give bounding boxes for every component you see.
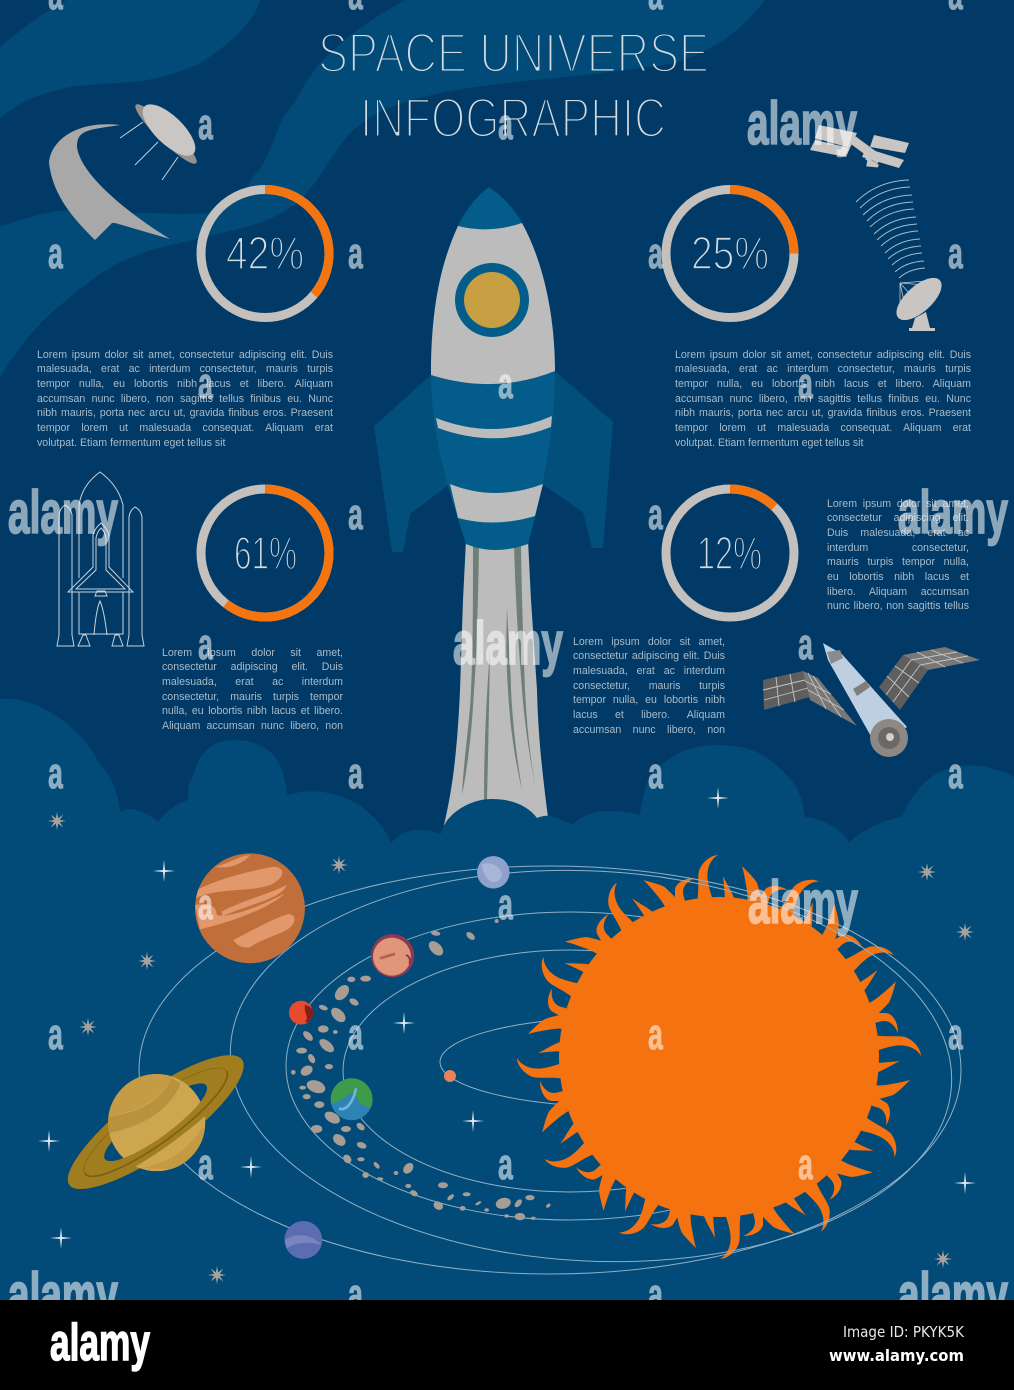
text block: top left: malesuada, erat ac interdum consectetur, mauris turpis — [37, 363, 333, 375]
text block: lower left: Lorem ipsum dolor sit amet, — [162, 647, 343, 659]
text block: lower right: Duis malesuada, erat ac — [827, 527, 969, 539]
watermark pattern: a — [498, 879, 513, 929]
icon: satellite station — [810, 125, 909, 168]
watermark pattern: a — [198, 1139, 213, 1189]
watermark pattern: alamy — [8, 479, 118, 546]
text block: lower centre: consectetur, mauris turpis — [573, 680, 725, 692]
rocket fins — [374, 371, 613, 552]
watermark pattern: a — [198, 358, 213, 408]
footer bar — [0, 1300, 1014, 1390]
donut: 42% — [201, 190, 329, 318]
text block: lower right: interdum consectetur, — [827, 542, 969, 554]
text block: lower right: consectetur adipiscing elit. — [827, 512, 969, 524]
lower cloud background — [0, 698, 1014, 1300]
planet: earth — [330, 1078, 373, 1120]
rocket exhaust — [444, 540, 549, 825]
rocket window — [455, 263, 529, 337]
watermark pattern: a — [198, 99, 213, 149]
watermark pattern: a — [348, 228, 363, 278]
text block: lower left: Aliquam accumsan nunc libero, non — [162, 720, 343, 732]
text block: top left — [37, 349, 333, 449]
text block: top left: volutpat. Etiam fermentum eget tellus sit — [37, 437, 225, 449]
text block: lower centre: Lorem ipsum dolor sit amet, — [573, 636, 725, 648]
donut: 25%: 25% — [691, 227, 769, 279]
watermark pattern: a — [648, 489, 663, 539]
text block: top right: accumsan nunc libero, non sagittis tellus finibus eu. Nunc — [675, 393, 971, 405]
outer orbits — [139, 852, 962, 1280]
icon: signal waves — [856, 180, 925, 278]
footer bar: www.alamy.com — [829, 1346, 964, 1365]
planet: mars — [289, 1001, 314, 1025]
text block: lower right: mauris turpis tempor nulla, — [827, 556, 969, 568]
watermark pattern: a — [198, 619, 213, 669]
text block: lower right: nunc libero, non sagittis tellus — [827, 600, 969, 612]
planet: saturn — [68, 1055, 244, 1189]
text block: top right — [675, 349, 971, 449]
watermark pattern: a — [498, 1139, 513, 1189]
icon: telescope satellite — [763, 643, 980, 757]
footer bar: Image ID: PKYK5K — [843, 1323, 965, 1341]
text block: lower left: consectetur adipiscing elit. Duis — [162, 661, 343, 673]
rocket — [374, 187, 613, 825]
text block: lower left — [162, 647, 343, 732]
watermark pattern: alamy — [453, 610, 563, 677]
watermark pattern: a — [498, 99, 513, 149]
donut: 42%: 42% — [226, 227, 304, 279]
text block: lower left: consectetur, mauris turpis tempor — [162, 691, 343, 703]
donut: 61%: 61% — [234, 527, 297, 579]
planet: mercury — [444, 1070, 456, 1082]
watermark pattern: a — [648, 748, 663, 798]
watermark pattern: a — [948, 748, 963, 798]
watermark pattern: a — [48, 228, 63, 278]
watermark pattern: a — [798, 1139, 813, 1189]
watermark pattern: alamy — [748, 869, 858, 936]
text block: top left: Lorem ipsum dolor sit amet, consectetur adipiscing elit. Duis — [37, 349, 333, 361]
sun — [517, 855, 921, 1259]
watermark pattern: a — [48, 1009, 63, 1059]
solar panels — [763, 647, 980, 726]
watermark pattern: a — [648, 228, 663, 278]
donut: 61% — [201, 489, 329, 617]
watermark pattern: a — [348, 1269, 363, 1319]
title — [318, 21, 709, 149]
watermark pattern: a — [648, 1269, 663, 1319]
text block: lower right — [827, 498, 969, 612]
watermark pattern: a — [348, 748, 363, 798]
planet: uranus — [477, 856, 510, 889]
planet: jupiter — [195, 853, 305, 963]
title: SPACE UNIVERSE — [318, 21, 709, 84]
text block: lower centre: tempor nulla, eu lobortis nibh — [573, 694, 725, 706]
watermark pattern: a — [798, 358, 813, 408]
icon: flying saucer with swoosh — [49, 96, 203, 240]
text block: top right: nibh mauris, porta nec arcu ut, gravida finibus eros. Praesent — [675, 407, 971, 419]
text block: lower centre: accumsan nunc libero, non — [573, 724, 725, 736]
text block: lower left: nulla, eu lobortis nibh lacus et libero. — [162, 705, 343, 717]
text block: top right: Lorem ipsum dolor sit amet, consectetur adipiscing elit. Duis — [675, 349, 971, 361]
text block: top left: nibh mauris, porta nec arcu ut, gravida finibus eros. Praesent — [37, 407, 333, 419]
text block: lower left: malesuada, erat ac interdum — [162, 676, 343, 688]
text block: top right: tempor lorem ut malesuada consequat. Aliquam erat — [675, 422, 971, 434]
footer bar: alamy — [50, 1314, 150, 1372]
text block: lower right: libero. Aliquam accumsan — [827, 586, 969, 598]
text block: lower centre: consectetur adipiscing elit. Duis — [573, 650, 725, 662]
watermark pattern: a — [348, 1009, 363, 1059]
watermark pattern: alamy — [8, 1261, 118, 1328]
text block: lower centre — [573, 636, 725, 736]
icon: satellite dish — [889, 271, 949, 331]
watermark pattern: a — [198, 879, 213, 929]
watermark pattern: a — [48, 748, 63, 798]
watermark pattern: a — [948, 228, 963, 278]
donut: 25% — [666, 190, 794, 318]
watermark pattern: a — [648, 1009, 663, 1059]
text block: top left: tempor nulla, eu lobortis nibh lacus et libero. Aliquam — [37, 378, 333, 390]
text block: top right: volutpat. Etiam fermentum eget tellus sit — [675, 437, 863, 449]
watermark pattern: a — [348, 489, 363, 539]
text block: lower centre: malesuada, erat ac interdum — [573, 665, 725, 677]
text block: lower centre: lacus et libero. Aliquam — [573, 709, 725, 721]
planets — [51, 853, 510, 1259]
title: INFOGRAPHIC — [360, 86, 666, 149]
icon: space shuttle outline — [57, 472, 144, 646]
watermark pattern: a — [948, 1009, 963, 1059]
text block: top left: accumsan nunc libero, non sagittis tellus finibus eu. Nunc — [37, 393, 333, 405]
text block: lower right: Lorem ipsum dolor sit amet, — [827, 498, 969, 510]
asteroid belt — [291, 919, 551, 1220]
planet: venus — [371, 934, 414, 977]
watermark pattern: alamy — [747, 90, 857, 157]
planet: neptune — [284, 1221, 322, 1259]
donut: 12%: 12% — [697, 527, 762, 579]
text block: top left: tempor lorem ut malesuada consequat. Aliquam erat — [37, 422, 333, 434]
watermark pattern: a — [798, 619, 813, 669]
text block: lower right: eu lobortis nibh lacus et — [827, 571, 969, 583]
donut: 12% — [666, 489, 794, 617]
rocket body — [431, 187, 555, 550]
watermark pattern: a — [498, 358, 513, 408]
inner orbits — [286, 912, 854, 1220]
text block: top right: tempor nulla, eu lobortis nibh lacus et libero. Aliquam — [675, 378, 971, 390]
stars — [38, 787, 976, 1284]
text block: top right: malesuada, erat ac interdum consectetur, mauris turpis — [675, 363, 971, 375]
